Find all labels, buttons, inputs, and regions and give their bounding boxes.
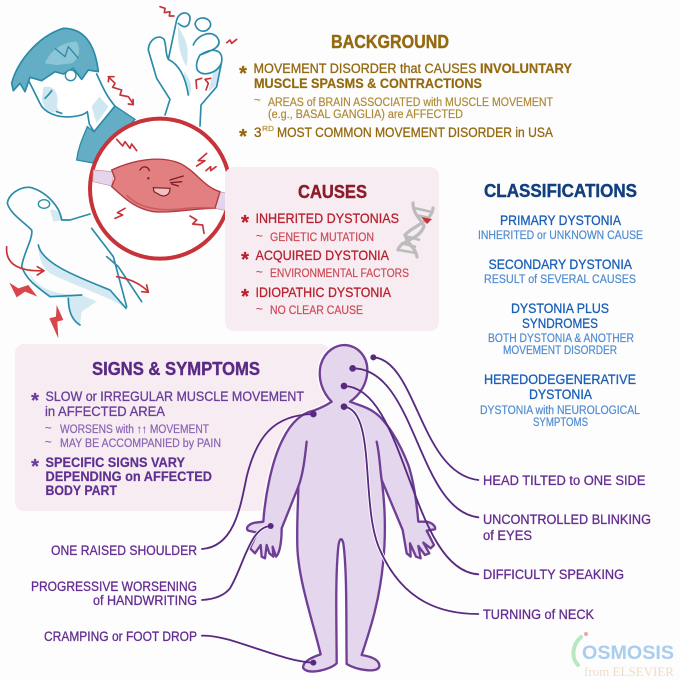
text: symptoms list: SLOW or IRREGULAR MUSCLE MOVEMENT <box>46 389 304 404</box>
text: primary dystonia: INHERITED or UNKNOWN CAUSE <box>478 230 643 242</box>
heading: signs and symptoms: SIGNS & SYMPTOMS <box>92 359 260 379</box>
text: dystonia plus syndromes: DYSTONIA PLUS <box>511 301 609 316</box>
panel: signs and symptoms <box>15 344 330 511</box>
heading: causes: CAUSES <box>298 182 367 202</box>
text: background points: * <box>239 63 247 85</box>
text: background points: RD <box>262 124 275 133</box>
text: background points: MOVEMENT DISORDER that CAUSES <box>254 61 476 76</box>
text: background points: AREAS of BRAIN ASSOCIATED with MUSCLE MOVEMENT <box>268 97 553 109</box>
text: symptoms list: MAY BE ACCOMPANIED by PAIN <box>60 438 221 450</box>
text: dystonia plus syndromes: SYNDROMES <box>522 316 598 331</box>
callout lines <box>202 354 478 666</box>
text: symptoms list: * <box>31 390 39 412</box>
text: symptoms list: DEPENDING on AFFECTED <box>46 469 212 484</box>
text: causes list <box>241 210 409 317</box>
panel: classifications <box>478 181 643 429</box>
text: symptoms list <box>31 389 304 498</box>
label: one raised shoulder: ONE RAISED SHOULDER <box>51 543 197 558</box>
logo: Osmosis from Elsevier: OSMOSIS <box>582 643 674 664</box>
logo: Osmosis from Elsevier: from ELSEVIER <box>584 665 675 679</box>
text: causes list: * <box>241 249 249 271</box>
text: heredodegenerative dystonia: DYSTONIA with NEUROLOGICAL <box>480 405 641 417</box>
text: causes list: ~ <box>256 231 263 243</box>
text: causes list: INHERITED DYSTONIAS <box>256 210 399 226</box>
text: causes list: ~ <box>256 267 263 279</box>
label: uncontrolled blinking: UNCONTROLLED BLINKING <box>483 512 651 527</box>
label: uncontrolled blinking: of EYES <box>483 528 532 543</box>
label: cramping or foot drop: CRAMPING or FOOT DROP <box>44 629 197 644</box>
text: symptoms list: WORSENS with ↑↑ MOVEMENT <box>60 424 209 436</box>
icon: DNA helix <box>398 203 433 257</box>
label: progressive worsening of handwriting <box>31 579 197 608</box>
panel: causes <box>225 167 439 331</box>
heading: background: BACKGROUND <box>331 32 449 52</box>
text: causes list: ENVIRONMENTAL FACTORS <box>270 268 409 280</box>
text: causes list: IDIOPATHIC DYSTONIA <box>256 284 392 300</box>
text: background points <box>239 61 572 148</box>
text: background points: 3 <box>254 125 262 140</box>
text: background points: MOST COMMON MOVEMENT DISORDER in USA <box>277 125 553 140</box>
text: symptoms list: BODY PART <box>46 483 118 498</box>
illustration: dystonia patients and muscle <box>7 7 237 338</box>
label: turning of neck: TURNING of NECK <box>483 607 594 622</box>
label: progressive worsening of handwriting: of HANDWRITING <box>93 593 197 608</box>
illustration: clenched hand <box>148 7 237 126</box>
label: progressive worsening of handwriting: PROGRESSIVE WORSENING <box>31 579 197 594</box>
text: background points: INVOLUNTARY <box>480 61 572 76</box>
logo: Osmosis from Elsevier <box>573 632 675 679</box>
panel: background <box>239 32 572 148</box>
text: dystonia plus syndromes: BOTH DYSTONIA & ANOTHER <box>488 333 634 345</box>
text: background points: (e.g., BASAL GANGLIA) are AFFECTED <box>268 109 463 121</box>
text: background points: ~ <box>254 95 261 107</box>
illustration: person with arched back <box>7 187 148 338</box>
text: symptoms list: ~ <box>45 437 52 449</box>
heading: classifications: CLASSIFICATIONS <box>484 181 637 201</box>
text: causes list: ~ <box>256 304 263 316</box>
text: symptoms list: * <box>31 456 39 478</box>
text: secondary dystonia <box>484 257 636 286</box>
text: symptoms list: ~ <box>45 423 52 435</box>
text: dystonia plus syndromes <box>488 301 634 357</box>
label: head tilted: HEAD TILTED to ONE SIDE <box>483 473 646 488</box>
text: dystonia plus syndromes: MOVEMENT DISORDER <box>503 345 617 357</box>
text: heredodegenerative dystonia: SYMPTOMS <box>533 417 588 429</box>
label: difficulty speaking: DIFFICULTY SPEAKING <box>483 567 624 582</box>
text: primary dystonia: PRIMARY DYSTONIA <box>500 213 621 228</box>
text: causes list: NO CLEAR CAUSE <box>270 305 363 317</box>
text: secondary dystonia: RESULT of SEVERAL CAUSES <box>484 274 636 286</box>
text: background points: MUSCLE SPASMS & CONTRACTIONS <box>254 76 482 91</box>
text: secondary dystonia: SECONDARY DYSTONIA <box>488 257 632 272</box>
text: primary dystonia <box>478 213 643 242</box>
illustration: strained muscle in circle <box>90 119 230 259</box>
label: uncontrolled blinking <box>483 512 651 543</box>
text: causes list: GENETIC MUTATION <box>270 232 374 244</box>
text: symptoms list: SPECIFIC SIGNS VARY <box>46 455 185 470</box>
illustration: boy with tilted head <box>12 28 135 163</box>
diagram: body with symptom lines <box>202 345 478 671</box>
text: background points: * <box>239 126 247 148</box>
text: causes list: * <box>241 286 249 308</box>
text: heredodegenerative dystonia: DYSTONIA <box>529 387 592 402</box>
text: symptoms list: in AFFECTED AREA <box>45 404 165 419</box>
text: causes list: ACQUIRED DYSTONIA <box>256 247 390 263</box>
body figure <box>247 345 435 671</box>
text: heredodegenerative dystonia <box>480 372 641 429</box>
text: causes list: * <box>241 212 249 234</box>
text: heredodegenerative dystonia: HEREDODEGENERATIVE <box>484 372 636 387</box>
